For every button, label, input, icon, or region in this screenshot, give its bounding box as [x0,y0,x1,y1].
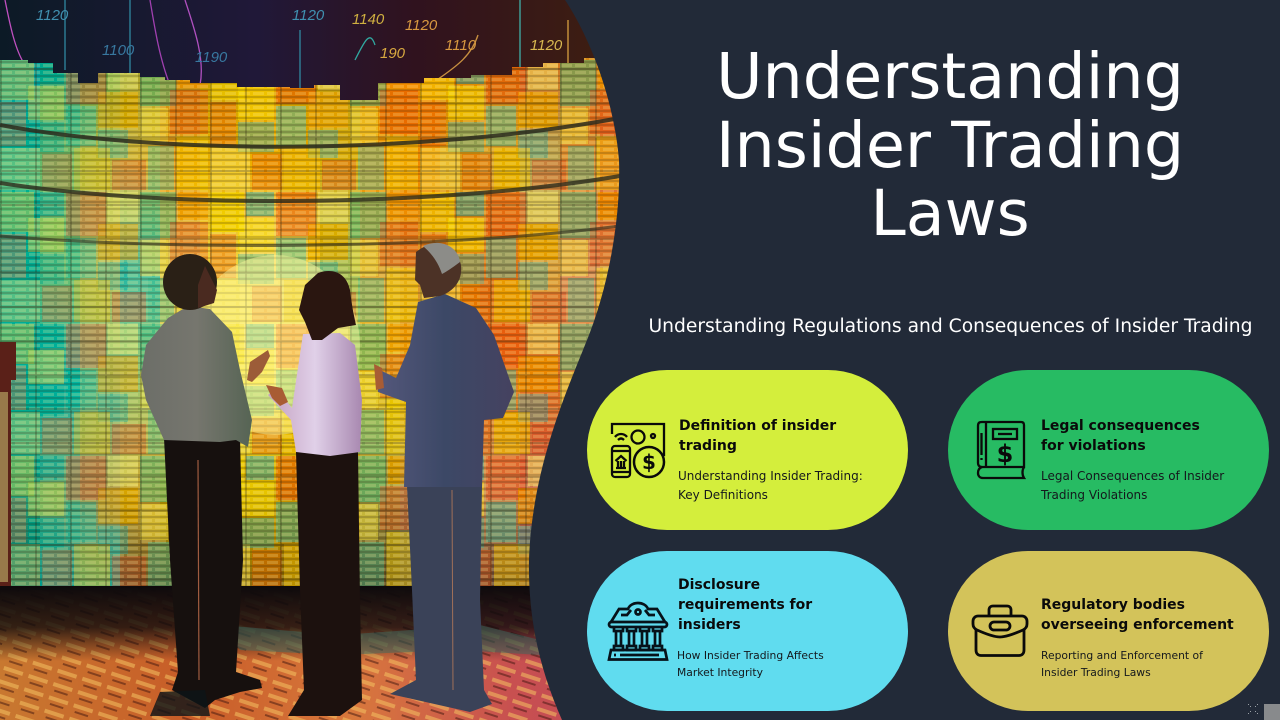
title [716,39,1184,250]
icon: banknote, phone and coin: $ [642,450,656,474]
dark kiosk at left edge [0,342,16,600]
figure: older man in blue suit [150,243,514,716]
description [677,649,824,679]
heading: Legal consequences [1041,418,1200,434]
dark upper wall with chart lines: 1100 [102,42,135,59]
dark upper wall with chart lines [0,0,640,105]
heading [679,418,836,454]
description [1041,649,1204,679]
heading: trading [679,438,737,454]
description: Reporting and Enforcement of [1041,649,1203,662]
heading: for violations [1041,438,1146,454]
heading [1041,418,1200,454]
title: Understanding [716,39,1184,113]
figure: man in grey shirt [141,254,270,708]
market data tile wall [0,58,640,600]
dark upper wall with chart lines: 1120 [36,7,69,24]
corner widget [1248,704,1280,720]
figure: woman in lilac blouse [266,271,362,716]
icon: law book with dollar sign: $ [997,440,1013,468]
bright glow behind figures [190,255,360,435]
description: How Insider Trading Affects [677,649,824,662]
heading: requirements for [678,597,812,613]
panel: disclosure requirements [587,551,908,711]
panel: regulatory bodies [948,551,1269,711]
description: Market Integrity [677,666,763,679]
icon: banknote, phone and coin [610,422,666,478]
dark upper wall with chart lines: 1120 [405,17,438,34]
description: Insider Trading Laws [1041,666,1151,679]
dark upper wall with chart lines: 190 [380,45,406,62]
kiosk screen [0,392,8,582]
heading [1041,597,1234,633]
dark upper wall with chart lines: 1120 [530,37,563,54]
subtitle: Understanding Regulations and Consequences of Insider Trading [648,316,1253,337]
title: Laws [870,176,1030,250]
floor reflecting market data [0,586,640,720]
illustration: traders before market wall [0,0,620,720]
description: Understanding Insider Trading: [678,469,863,483]
icon: classical bank building [607,602,669,661]
icon: law book with dollar sign [976,420,1026,480]
panel: legal consequences [948,370,1269,530]
dark upper wall with chart lines: 1110 [445,37,477,54]
heading: overseeing enforcement [1041,617,1234,633]
dark upper wall with chart lines: 1120 [292,7,325,24]
description [1040,469,1224,502]
dark wavy panel edge [529,0,640,720]
description: Trading Violations [1041,488,1147,502]
description [678,469,863,502]
title: Insider Trading [716,108,1184,182]
heading: Disclosure [678,577,760,593]
heading: Definition of insider [679,418,836,434]
heading: Regulatory bodies [1041,597,1185,613]
dark upper wall with chart lines: 1140 [352,11,385,28]
icon: briefcase [972,604,1028,657]
panel: definition of insider trading [587,370,908,530]
description: Key Definitions [678,488,768,502]
description: Legal Consequences of Insider [1041,469,1224,483]
heading: insiders [678,617,741,633]
dark upper wall with chart lines: 1190 [195,49,228,66]
heading [678,577,812,633]
